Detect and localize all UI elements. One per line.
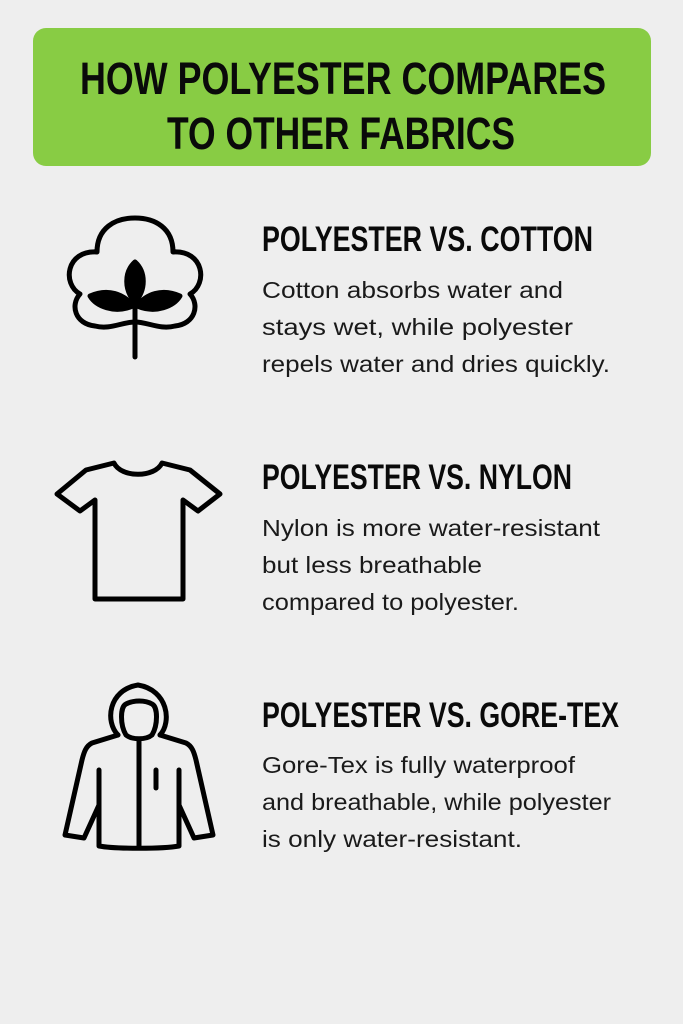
text: nylon: Nylon is more water-resistant xyxy=(262,515,601,541)
text: nylon: but less breathable xyxy=(262,552,482,578)
icon: jacket xyxy=(65,685,213,848)
text: gore-tex: and breathable, while polyester xyxy=(262,789,611,815)
title banner: TO OTHER FABRICS xyxy=(167,108,515,159)
text: cotton: stays wet, while polyester xyxy=(262,314,573,340)
heading: nylon: POLYESTER VS. NYLON xyxy=(262,458,572,497)
heading: cotton: POLYESTER VS. COTTON xyxy=(262,220,593,259)
title banner xyxy=(33,28,651,166)
text: gore-tex: is only water-resistant. xyxy=(262,826,522,852)
text: gore-tex: Gore-Tex is fully waterproof xyxy=(262,752,575,778)
text: cotton: Cotton absorbs water and xyxy=(262,277,563,303)
text: nylon xyxy=(262,515,601,615)
icon: cotton xyxy=(69,218,201,357)
text: gore-tex xyxy=(262,752,611,852)
text: cotton xyxy=(262,277,610,377)
icon: t-shirt xyxy=(57,463,220,599)
text: nylon: compared to polyester. xyxy=(262,589,519,615)
text: cotton: repels water and dries quickly. xyxy=(262,351,610,377)
